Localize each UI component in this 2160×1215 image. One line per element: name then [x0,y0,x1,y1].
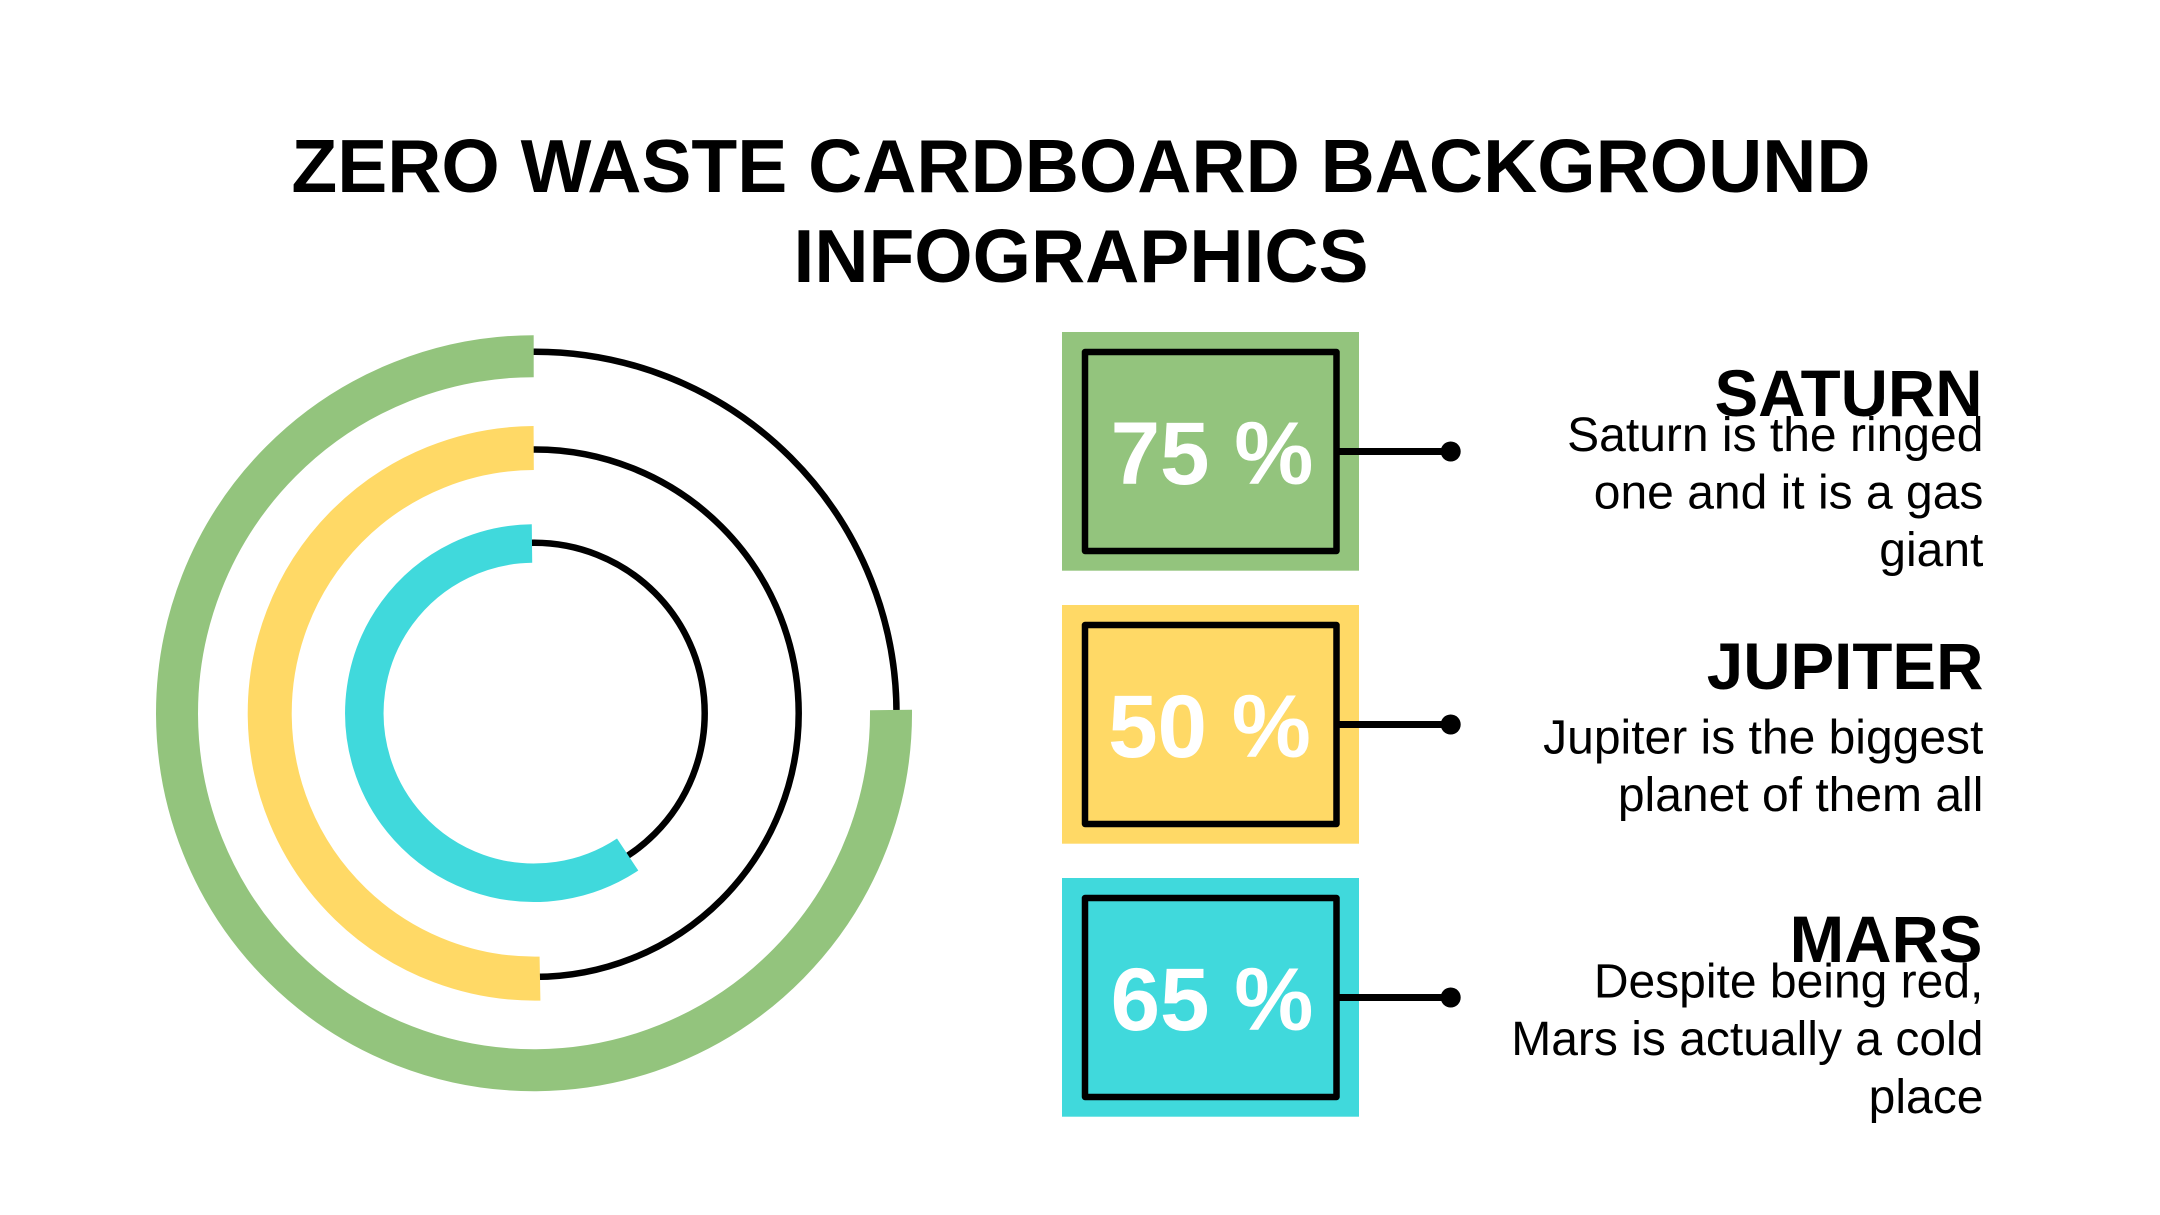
text: Jupiter: planet of them all [1618,769,1983,822]
box: 50%: 50 % [1108,676,1311,776]
box: 75%: 75 % [1111,403,1313,503]
text: Mars: Despite being red, [1594,955,1983,1008]
ring: Mars 65% [364,543,705,884]
box: 50% [1062,605,1359,844]
text: Saturn: giant [1879,524,1983,577]
title: ZERO WASTE CARDBOARD BACKGROUND [291,124,1871,208]
text: Jupiter: JUPITER [1707,630,1983,703]
box: 75% [1062,332,1359,571]
title [291,124,1871,298]
box: 65% [1062,878,1359,1117]
text: Saturn: SATURN [1714,357,1982,430]
stat: Jupiter 50% [1062,605,1983,844]
text: Mars [1511,903,1983,1124]
connector: Jupiter [1336,714,1461,734]
stat: Saturn 75% [1062,332,1983,577]
text: Saturn: one and it is a gas [1594,467,1983,520]
stat: Mars 65% [1062,878,1983,1124]
connector: Mars [1336,988,1461,1008]
concentric radial progress chart [174,352,896,1075]
title: INFOGRAPHICS [793,214,1369,298]
ring: Saturn 75% [174,352,896,1075]
text: Jupiter [1543,630,1983,822]
text: Mars: place [1869,1071,1983,1124]
box: 65%: 65 % [1111,949,1313,1049]
ring: Jupiter 50% [270,448,799,979]
text: Mars: Mars is actually a cold [1511,1013,1983,1066]
text: Saturn [1567,357,1983,577]
text: Mars: MARS [1790,903,1982,976]
text: Saturn: Saturn is the ringed [1567,409,1983,462]
text: Jupiter: Jupiter is the biggest [1543,711,1983,764]
connector: Saturn [1336,442,1461,462]
